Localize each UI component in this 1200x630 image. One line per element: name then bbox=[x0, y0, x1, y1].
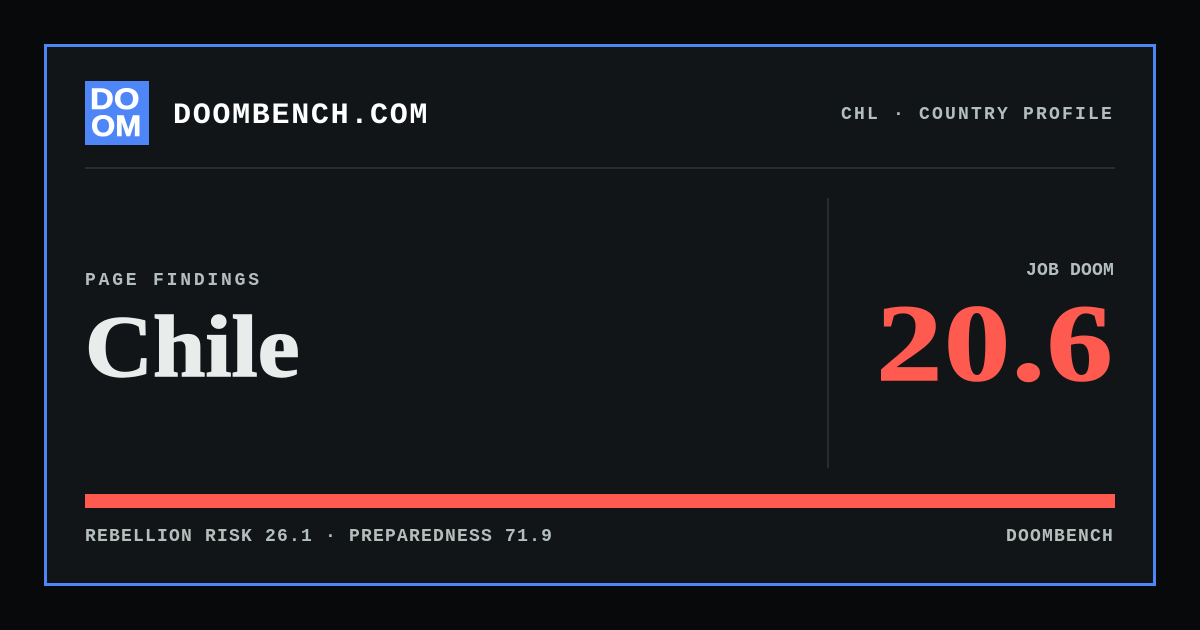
column divider bbox=[827, 198, 829, 468]
score value: 20.6 bbox=[876, 282, 1114, 404]
icon: DOOM logo: OM bbox=[91, 110, 141, 143]
footer metrics: REBELLION RISK 26.1 · PREPAREDNESS 71.9 bbox=[85, 527, 553, 547]
country title: Chile bbox=[85, 299, 299, 396]
country code and profile label: CHL · COUNTRY PROFILE bbox=[841, 105, 1114, 125]
score label: JOB DOOM bbox=[1026, 261, 1114, 281]
eyebrow label: PAGE FINDINGS bbox=[85, 271, 262, 291]
score bar bbox=[85, 494, 1115, 508]
header divider bbox=[85, 167, 1115, 169]
icon: DOOM logo: DO bbox=[90, 83, 140, 116]
footer brand: DOOMBENCH bbox=[1006, 527, 1114, 547]
icon: DOOM logo bbox=[85, 81, 149, 145]
site name: DOOMBENCH.COM bbox=[173, 99, 429, 133]
panel: card frame bbox=[44, 44, 1156, 586]
